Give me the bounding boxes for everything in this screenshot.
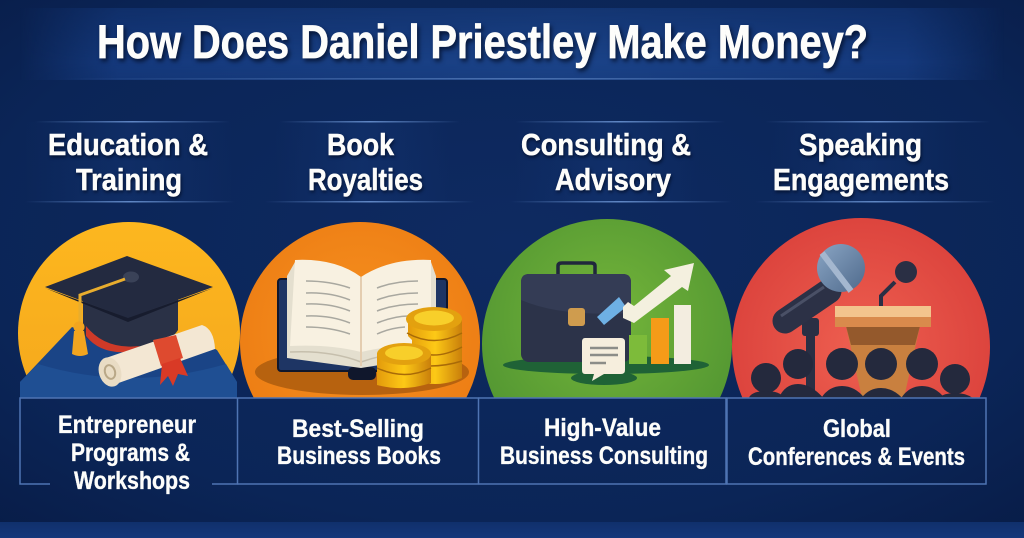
icon: microphone, podium and audience — [732, 218, 990, 398]
label box: global conferences and events — [727, 398, 986, 484]
icon: open book and coins — [240, 222, 480, 398]
heading: education and training: Training — [76, 162, 182, 197]
title: How Does Daniel Priestley Make Money? — [97, 15, 868, 68]
heading: speaking engagements — [755, 121, 995, 202]
heading: consulting and advisory — [510, 121, 732, 202]
heading: education and training — [25, 121, 235, 202]
label box: high-value business consulting: High-Value — [544, 414, 661, 442]
heading: speaking engagements: Engagements — [773, 162, 949, 197]
heading: consulting and advisory: Consulting & — [521, 127, 691, 162]
label box: best-selling business books: Best-Selling — [292, 415, 424, 443]
label box: global conferences and events: Global — [823, 415, 891, 443]
label box: high-value business consulting — [478, 398, 726, 484]
icon: briefcase and growth chart — [482, 219, 732, 398]
heading: book royalties: Royalties — [308, 162, 423, 197]
panel: speaking engagements — [727, 121, 995, 484]
label box: entrepreneur programs: Programs & — [71, 439, 190, 467]
panel: consulting and advisory — [478, 121, 732, 484]
heading: book royalties — [265, 121, 475, 202]
label box: entrepreneur programs — [20, 398, 238, 495]
label box: entrepreneur programs: Workshops — [74, 467, 190, 495]
title banner — [20, 8, 1004, 80]
icon: graduation cap and diploma — [18, 222, 240, 398]
heading: education and training: Education & — [48, 127, 208, 162]
label box: best-selling business books: Business Books — [277, 442, 441, 470]
label box: best-selling business books — [238, 398, 478, 484]
panel: book royalties — [238, 121, 480, 484]
panel: education and training — [18, 121, 240, 495]
heading: consulting and advisory: Advisory — [555, 162, 672, 197]
heading: speaking engagements: Speaking — [799, 127, 922, 162]
label box: entrepreneur programs: Entrepreneur — [58, 411, 196, 439]
heading: book royalties: Book — [327, 127, 395, 162]
bottom band — [0, 522, 1024, 538]
label box: global conferences and events: Conferences & Events — [748, 443, 965, 471]
label box: high-value business consulting: Business Consulting — [500, 442, 708, 470]
